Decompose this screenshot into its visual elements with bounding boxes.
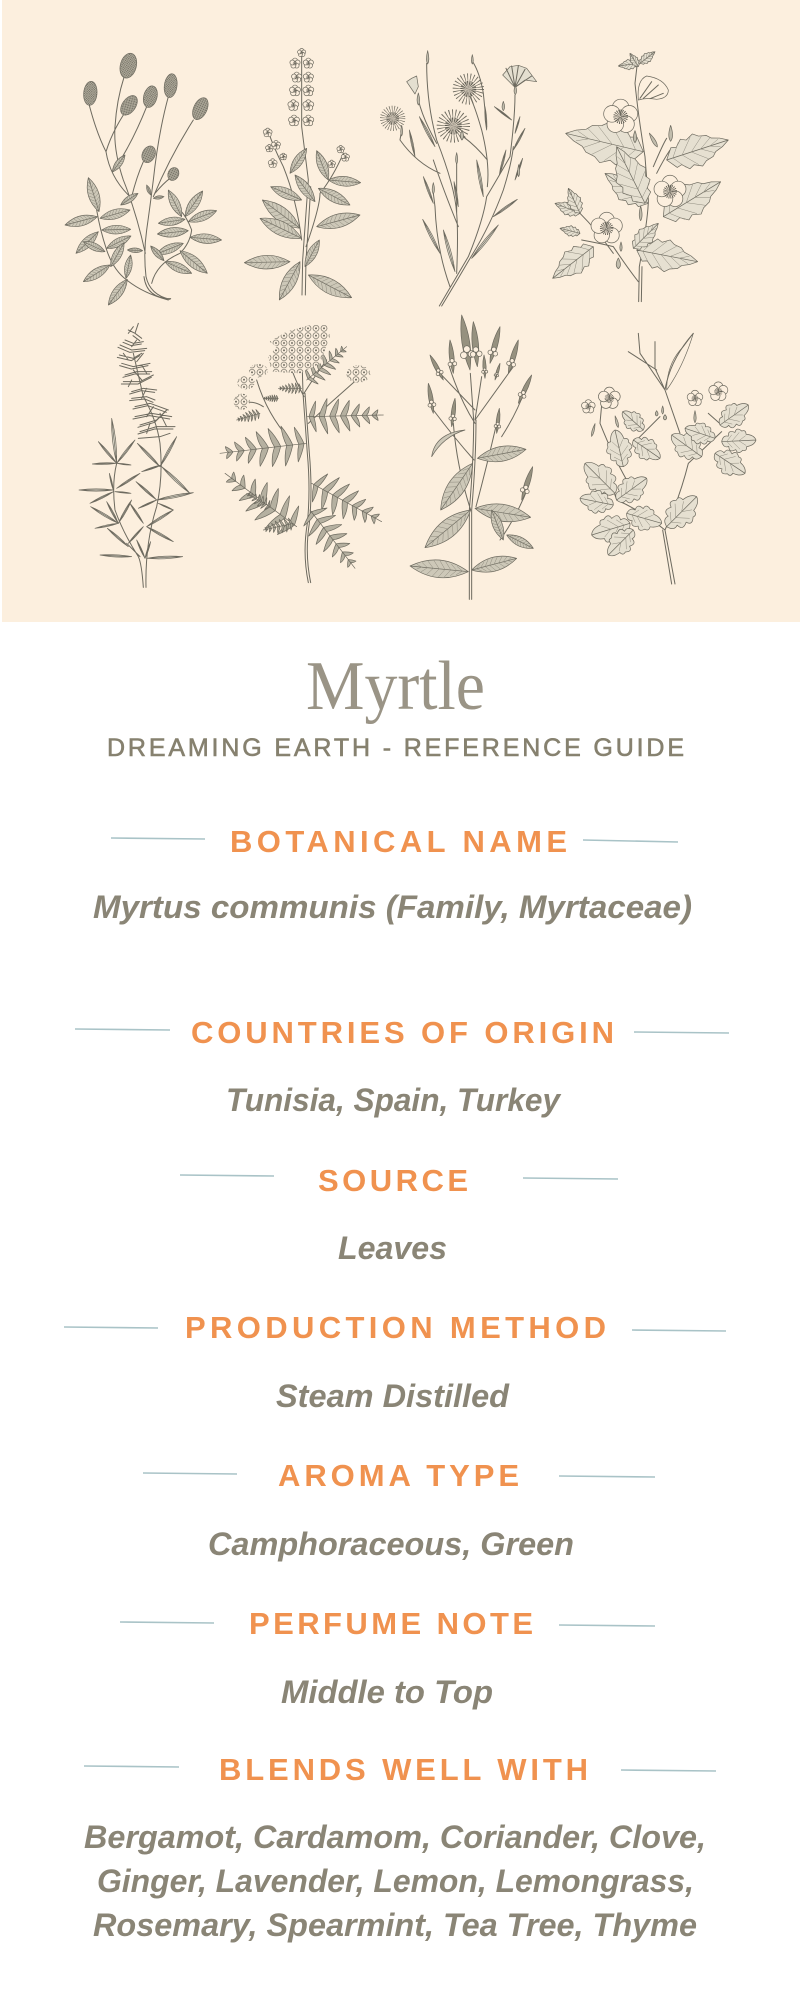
section: source: Leaves [338, 1230, 447, 1266]
section: blends well with: Rosemary, Spearmint, Tea Tree, Thyme [93, 1907, 697, 1943]
section: countries of origin: Tunisia, Spain, Turkey [226, 1082, 562, 1118]
section: perfume note: Middle to Top [281, 1674, 493, 1710]
section: perfume note: PERFUME NOTE [249, 1606, 533, 1641]
section: production method: PRODUCTION METHOD [185, 1310, 606, 1345]
title: Myrtle [306, 648, 485, 725]
section: botanical name: Myrtus communis (Family, Myrtaceae) [93, 889, 692, 925]
section: countries of origin [75, 1015, 729, 1118]
plant: burnet with oval flower heads [64, 51, 222, 308]
section: perfume note [120, 1606, 655, 1710]
section: blends well with: BLENDS WELL WITH [219, 1752, 588, 1787]
section: blends well with: Ginger, Lavender, Lemon, Lemongrass, [97, 1863, 694, 1899]
section: aroma type: Camphoraceous, Green [208, 1526, 574, 1562]
section: production method: Steam Distilled [276, 1378, 510, 1414]
subtitle: DREAMING EARTH - REFERENCE GUIDE [107, 734, 684, 762]
section: source [180, 1163, 618, 1266]
plant: sage with flower spike [244, 48, 362, 304]
plant: hyssop with narrow leaves [79, 323, 194, 587]
section: aroma type [143, 1458, 655, 1562]
plant: cornflower [385, 51, 537, 306]
plant: tansy with fern-like leaves [213, 325, 390, 583]
section: aroma type: AROMA TYPE [278, 1458, 519, 1493]
section: countries of origin: COUNTRIES OF ORIGIN [191, 1015, 614, 1050]
panel: botanical illustrations [2, 0, 800, 622]
section: botanical name: BOTANICAL NAME [230, 824, 567, 859]
plant: vervain with pointed spikes [409, 314, 537, 599]
section: production method [64, 1310, 726, 1414]
section: botanical name [93, 824, 692, 925]
section: blends well with: Bergamot, Cardamom, Coriander, Clove, [84, 1819, 706, 1855]
plant: marsh mallow [544, 48, 734, 302]
section: blends well with [84, 1752, 716, 1943]
plant: greater celandine with lobed leaves [575, 333, 757, 584]
section: source: SOURCE [318, 1163, 468, 1198]
